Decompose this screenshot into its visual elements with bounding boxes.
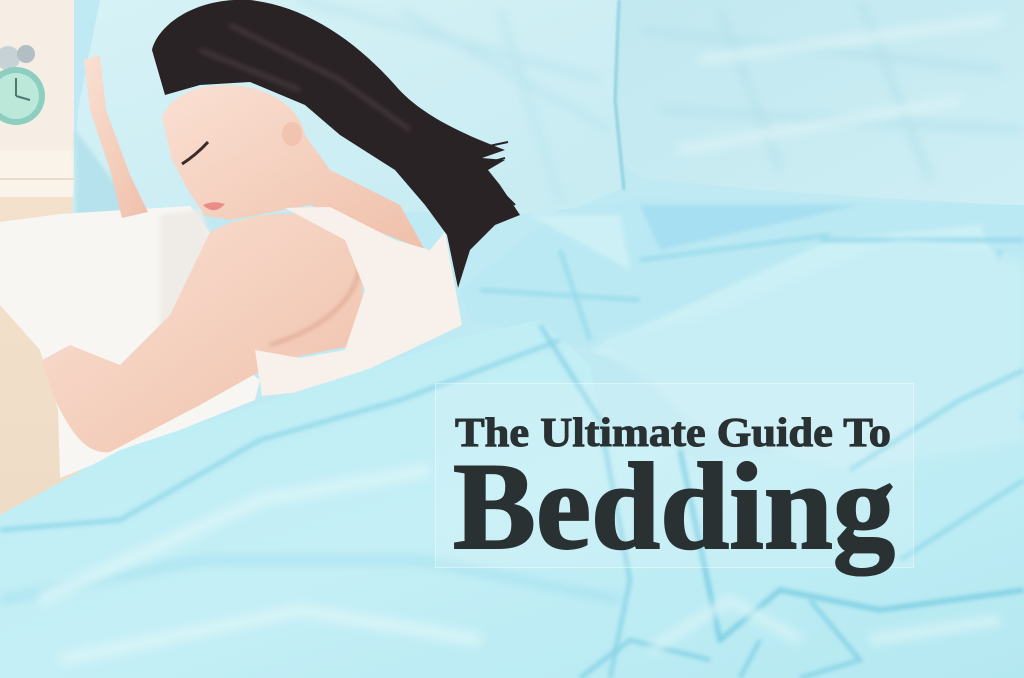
subtitle line: The Ultimate Guide To	[455, 409, 891, 455]
title	[453, 409, 895, 576]
rumpled sheet folds	[460, 198, 1024, 450]
face and neck	[162, 85, 425, 250]
sleeping woman	[42, 0, 520, 452]
right pillow	[618, 0, 1024, 206]
hair	[152, 0, 520, 288]
ear	[282, 122, 302, 146]
icon: alarm clock	[0, 45, 45, 125]
title box overlay	[436, 384, 914, 568]
white hugging pillow	[0, 206, 260, 478]
white tank top	[255, 207, 462, 396]
left pillow	[72, 0, 624, 216]
nightstand and floor	[0, 0, 80, 515]
eye, lips	[182, 142, 208, 164]
raised hand and forearm	[84, 55, 148, 218]
main word: Bedding	[453, 438, 895, 576]
duvet	[0, 240, 1024, 678]
arm and shoulder	[42, 214, 363, 452]
